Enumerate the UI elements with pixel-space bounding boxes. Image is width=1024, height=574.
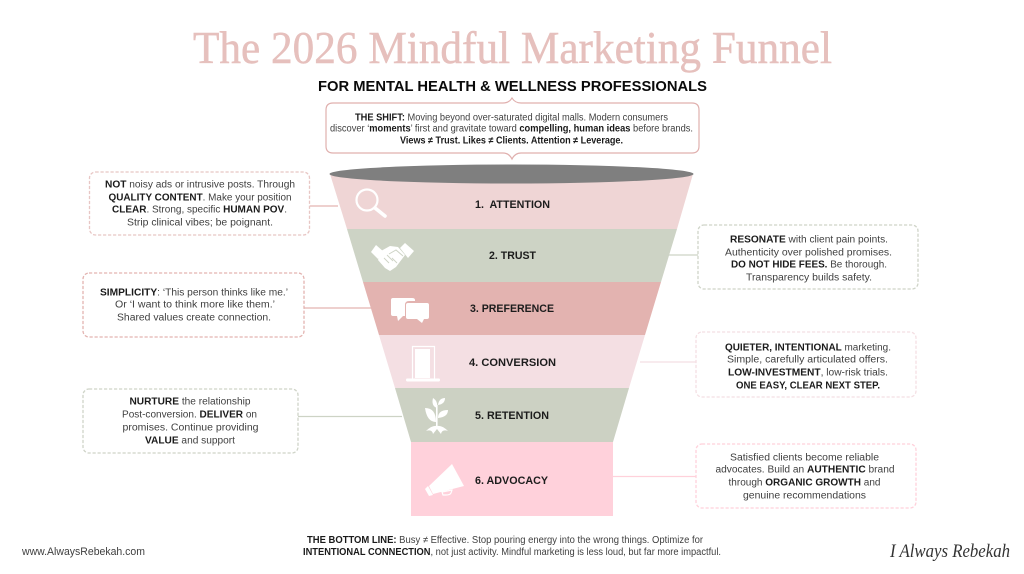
connector: conversion xyxy=(640,361,696,363)
callout: the shift: Views ≠ Trust. Likes ≠ Clients. Attention ≠ Leverage. xyxy=(400,136,623,146)
band: conversion xyxy=(379,335,645,388)
callout: trust: DO NOT HIDE FEES. Be thorough. xyxy=(731,260,887,270)
callout: retention: VALUE and support xyxy=(145,436,235,446)
website: www.AlwaysRebekah.com xyxy=(21,546,145,558)
callout: retention: Post-conversion. DELIVER on xyxy=(122,410,257,420)
label: retention: 5. RETENTION xyxy=(475,410,549,422)
callout: preference: Or ‘I want to think more like them.’ xyxy=(115,300,275,310)
bottom line: INTENTIONAL CONNECTION, not just activity. Mindful marketing is less loud, but far more impactful. xyxy=(303,547,721,558)
icon: megaphone xyxy=(425,464,464,496)
band: retention xyxy=(395,388,629,442)
callout: retention: promises. Continue providing xyxy=(122,422,258,434)
band: attention xyxy=(330,174,693,229)
label: conversion: 4. CONVERSION xyxy=(469,357,556,369)
connector: retention xyxy=(298,416,402,418)
icon: chat bubbles xyxy=(391,298,429,323)
label: trust: 2. TRUST xyxy=(489,250,536,262)
callout: trust: Transparency builds safety. xyxy=(746,272,872,284)
icon: magnifier xyxy=(356,190,385,216)
callout: the shift: THE SHIFT: Moving beyond over-saturated digital malls. Modern consumers xyxy=(355,112,668,124)
connector: advocacy xyxy=(613,476,696,478)
icon: plant xyxy=(425,398,448,434)
callout: preference: SIMPLICITY: ‘This person thinks like me.’ xyxy=(100,288,288,298)
funnel opening xyxy=(330,164,694,184)
callout: conversion: ONE EASY, CLEAR NEXT STEP. xyxy=(736,380,880,392)
callout: conversion: LOW-INVESTMENT, low-risk trials. xyxy=(728,368,888,378)
callout: conversion: Simple, carefully articulated offers. xyxy=(727,354,888,366)
label: advocacy: 6. ADVOCACY xyxy=(475,475,549,487)
callout: attention: Strip clinical vibes; be poignant. xyxy=(127,218,273,228)
subtitle: FOR MENTAL HEALTH & WELLNESS PROFESSIONALS xyxy=(318,78,707,95)
bottom line: THE BOTTOM LINE: Busy ≠ Effective. Stop pouring energy into the wrong things. Optimize for xyxy=(307,535,704,546)
callout: advocacy: through ORGANIC GROWTH and xyxy=(728,478,880,488)
connector: attention xyxy=(310,205,338,207)
label: attention: 1. ATTENTION xyxy=(475,199,550,211)
bottom line xyxy=(303,535,721,558)
connector: preference xyxy=(304,307,372,309)
band: preference xyxy=(363,282,661,335)
band: advocacy xyxy=(411,442,613,516)
callout: preference xyxy=(83,273,304,337)
label: preference: 3. PREFERENCE xyxy=(470,303,554,315)
callout: trust: RESONATE with client pain points. xyxy=(730,234,888,246)
callout: retention: NURTURE the relationship xyxy=(130,396,251,408)
callout: conversion: QUIETER, INTENTIONAL marketing. xyxy=(725,342,891,354)
funnel xyxy=(330,164,694,516)
callout: attention: CLEAR. Strong, specific HUMAN POV. xyxy=(112,204,287,216)
icon: door xyxy=(406,346,440,382)
callout: advocacy: genuine recommendations xyxy=(743,490,866,502)
callout: advocacy: Satisfied clients become reliable xyxy=(730,452,879,464)
callout: advocacy: advocates. Build an AUTHENTIC brand xyxy=(716,464,894,476)
band: trust xyxy=(347,229,677,282)
callout: retention xyxy=(83,389,298,453)
callout: conversion xyxy=(696,332,916,397)
connector: trust xyxy=(668,254,698,256)
title: The 2026 Mindful Marketing Funnel xyxy=(193,22,832,73)
icon: handshake xyxy=(371,243,414,271)
callout: the shift: discover ‘moments’ first and gravitate toward compelling, human ideas before brands. xyxy=(330,124,693,134)
callout: trust xyxy=(698,225,918,289)
callout: the shift xyxy=(326,98,699,159)
callout: attention: QUALITY CONTENT. Make your position xyxy=(108,192,292,204)
callout: attention xyxy=(90,172,310,235)
callout: preference: Shared values create connection. xyxy=(117,312,271,324)
callout: trust: Authenticity over polished promises. xyxy=(725,248,892,258)
signature: I Always Rebekah xyxy=(889,541,1010,562)
callout: advocacy xyxy=(696,444,916,508)
callout: attention: NOT noisy ads or intrusive posts. Through xyxy=(105,180,295,190)
